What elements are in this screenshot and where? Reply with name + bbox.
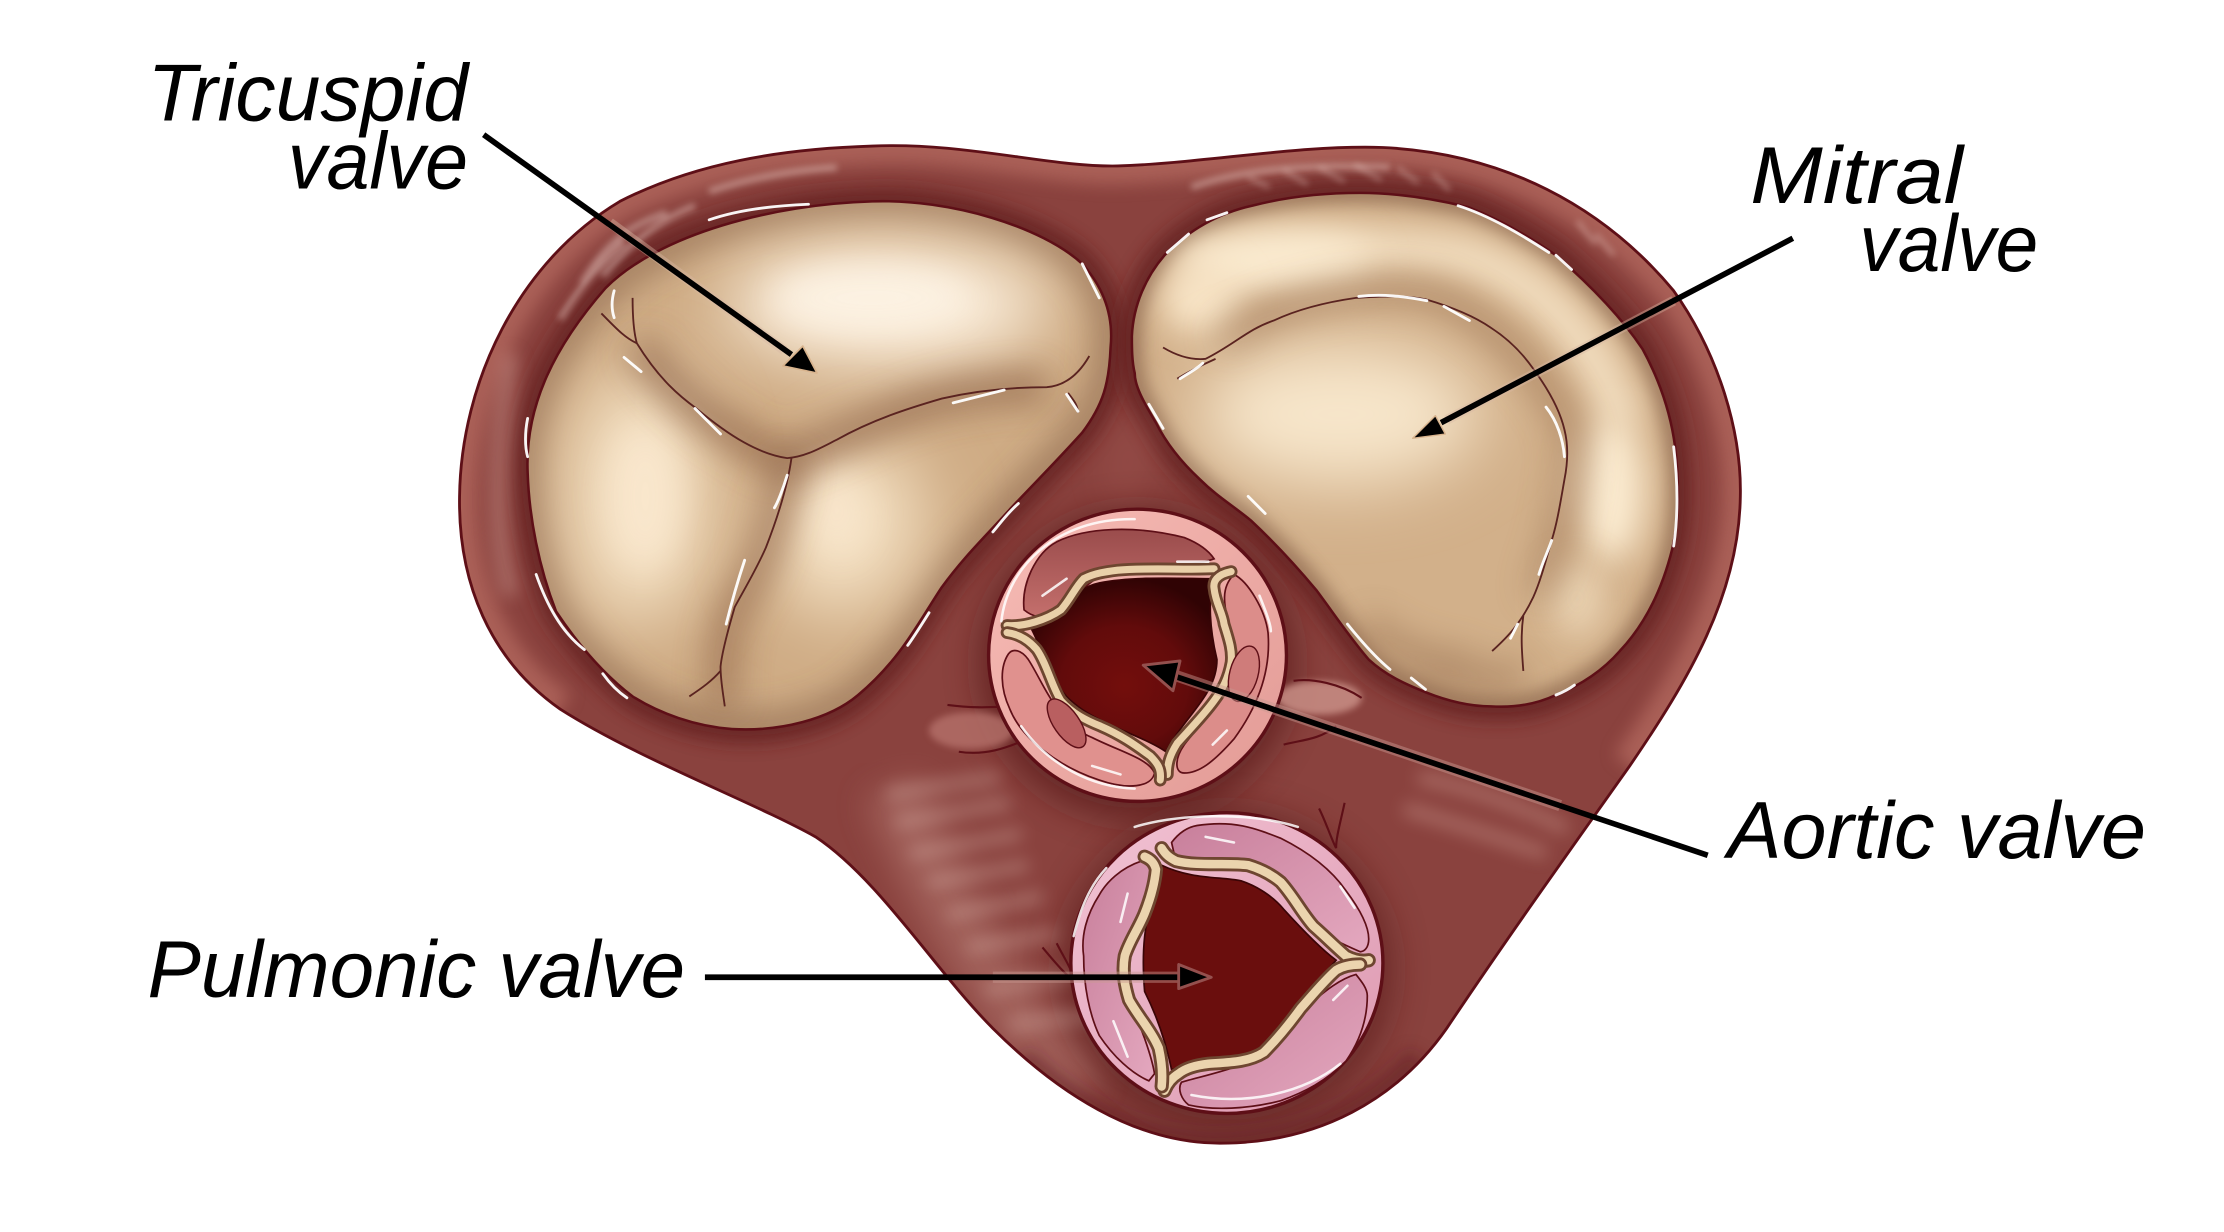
arrow: pulmonic valve pointer <box>705 964 1211 989</box>
label: Tricuspid valve <box>148 49 471 207</box>
label: Aortic valve: Aortic valve <box>1724 786 2146 876</box>
arrow: aortic valve pointer <box>1143 661 1708 855</box>
label: Mitral valve: Mitral <box>1750 131 1965 221</box>
tricuspid valve leaflets <box>526 201 1111 729</box>
pulmonic valve <box>1071 813 1383 1113</box>
mitral valve leaflets <box>1132 193 1678 707</box>
label: Pulmonic valve: Pulmonic valve <box>148 925 685 1015</box>
label: Tricuspid valve: valve <box>288 117 468 207</box>
aortic valve <box>989 509 1286 801</box>
arrow: mitral valve pointer <box>1413 238 1793 438</box>
arrow: tricuspid valve pointer <box>484 135 817 373</box>
infographic: heart valves seen from above <box>150 62 2143 1145</box>
label: Tricuspid valve: Tricuspid <box>148 49 471 139</box>
label: Mitral valve <box>1750 131 2038 289</box>
heart base illustration <box>460 146 1740 1143</box>
muscular wall <box>460 146 1740 1143</box>
label: Mitral valve: valve <box>1859 199 2038 289</box>
